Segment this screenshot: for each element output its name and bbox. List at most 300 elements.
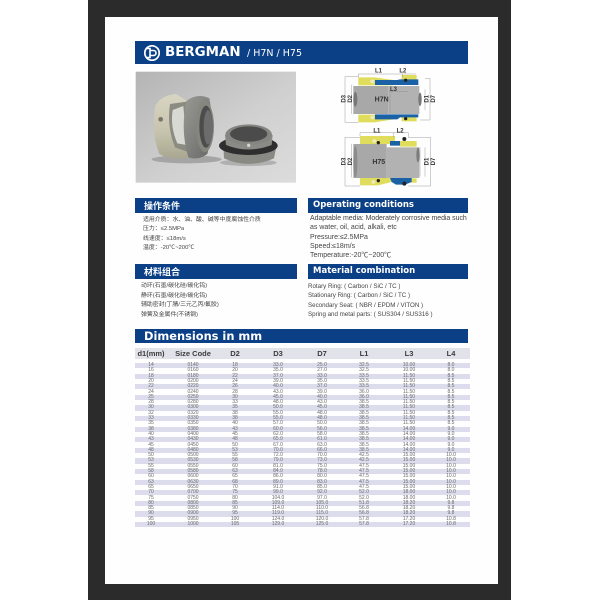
body text: Stationary Ring: ( Carbon / SiC / TC )	[308, 292, 410, 299]
table: dimensions: 36.0	[359, 394, 369, 400]
table: dimensions: 52.0	[359, 494, 369, 500]
table: dimensions: 55	[232, 452, 238, 458]
table: dimensions: 125.0	[316, 521, 328, 527]
table: dimensions: 33.0	[317, 373, 327, 379]
table: dimensions: 58.0	[317, 431, 327, 437]
table: dimensions: 57.8	[359, 516, 369, 522]
table: dimensions: 115.0	[316, 510, 328, 516]
table: dimensions: 100	[147, 521, 155, 527]
table: dimensions: 38.5	[359, 410, 369, 416]
table: dimensions: 15.00	[403, 452, 415, 458]
table: dimensions: 80.0	[317, 473, 327, 479]
table: dimensions: 33.5	[359, 383, 369, 389]
table: dimensions: 90	[232, 505, 238, 511]
body text: Pressure:≤2.5MPa	[310, 234, 368, 241]
table: dimensions: 24	[148, 388, 154, 394]
table: dimensions: 0500	[187, 452, 199, 458]
table: dimensions: 53	[232, 447, 238, 453]
table: dimensions: 18	[232, 362, 238, 368]
table: dimensions: 8.5	[448, 388, 454, 394]
table: dimensions: 0300	[187, 404, 199, 410]
table: dimensions: 67.0	[273, 442, 283, 448]
table: dimensions: 0200	[187, 378, 199, 384]
table: dimensions: 8.5	[448, 378, 454, 384]
table: dimensions: 32	[148, 410, 154, 416]
table: dimensions: 22	[148, 383, 154, 389]
table: dimensions: 9.0	[448, 426, 454, 432]
table: dimensions: 63	[148, 479, 154, 485]
table: dimensions: 91.0	[273, 484, 283, 490]
table: dimensions: 0160	[187, 367, 199, 373]
table: dimensions: 35	[148, 420, 154, 426]
picture frame	[88, 0, 511, 600]
table: dimensions: 51.8	[359, 500, 369, 506]
table: dimensions: 95	[232, 510, 238, 516]
table header row: D2	[230, 349, 240, 358]
table: dimensions: 75	[148, 494, 154, 500]
body text: 压力：≤2.5MPa	[143, 226, 184, 232]
table: dimensions: 47.5	[359, 479, 369, 485]
table: dimensions: 48	[148, 447, 154, 453]
table: dimensions: 9.0	[448, 436, 454, 442]
body text	[308, 283, 432, 318]
body text: 辅助密封(丁腈/三元乙丙/氟胶)	[141, 302, 219, 308]
table: dimensions: 75.0	[317, 463, 327, 469]
table: dimensions: 48	[232, 436, 238, 442]
table: dimensions: 0380	[187, 426, 199, 432]
table: dimensions: 25	[148, 394, 154, 400]
table: dimensions: 18.20	[403, 500, 415, 506]
table: dimensions: 11.50	[403, 420, 415, 426]
table: dimensions: 0320	[187, 410, 199, 416]
table: dimensions: 72.0	[273, 452, 283, 458]
table: dimensions: 10.0	[446, 484, 456, 490]
table: dimensions: 84.0	[273, 468, 283, 474]
diagram: H7N cross-section: D7	[431, 94, 437, 103]
shadow	[152, 155, 222, 163]
table: dimensions: 8.5	[448, 415, 454, 421]
table header row: D3	[273, 349, 283, 358]
table: dimensions: 90	[148, 510, 154, 516]
heading	[135, 198, 297, 213]
table: dimensions: 10.0	[446, 452, 456, 458]
table: dimensions: 47.5	[359, 484, 369, 490]
body text: Secondary Seat: ( NBR / EPDM / VITON )	[308, 302, 423, 309]
heading: dimensions in mm	[135, 329, 468, 343]
heading: dimensions in mm: Dimensions in mm	[144, 329, 262, 343]
table: dimensions: 0400	[187, 431, 199, 437]
table header row: L4	[447, 349, 455, 358]
heading: Operating conditions	[313, 200, 414, 210]
table: dimensions: 22	[232, 373, 238, 379]
page sheet	[105, 17, 498, 584]
table: dimensions: 18.00	[403, 494, 415, 500]
table: dimensions: 40	[148, 431, 154, 437]
table: dimensions: 17.20	[403, 521, 415, 527]
diagram: H75 cross-section: D3	[342, 157, 348, 165]
body text: 适用介质：水、油、酸、碱等中度腐蚀性介质	[143, 217, 261, 223]
table: dimensions: 10.0	[446, 479, 456, 485]
body text	[143, 216, 261, 251]
body text: 弹簧及金属件(不锈钢)	[141, 312, 198, 318]
table: dimensions: 15.00	[403, 468, 415, 474]
table: dimensions: 92.0	[317, 489, 327, 495]
body text: 动环(石墨/碳化硅/碳化钨)	[141, 283, 207, 289]
table: dimensions: 0850	[187, 505, 199, 511]
table: dimensions: 9.8	[448, 510, 454, 516]
table: dimensions: 38	[232, 410, 238, 416]
table: dimensions: 10.0	[446, 468, 456, 474]
table: dimensions: 8.0	[448, 367, 454, 373]
icon: Bergman logo	[144, 45, 160, 61]
table: dimensions: 80	[148, 500, 154, 506]
table: dimensions: 14.00	[403, 447, 415, 453]
table: dimensions: 9.0	[448, 442, 454, 448]
table: dimensions: 8.5	[448, 420, 454, 426]
table: dimensions: 70	[148, 489, 154, 495]
heading: 材料组合	[144, 265, 180, 278]
table: dimensions: 10.8	[446, 521, 456, 527]
table: dimensions: 38.5	[359, 404, 369, 410]
table: dimensions: 40.0	[273, 383, 283, 389]
table: dimensions: 50	[232, 442, 238, 448]
panel: operating conditions (Chinese)	[135, 198, 297, 251]
table: dimensions: 9.8	[448, 505, 454, 511]
table: dimensions: 28	[232, 388, 238, 394]
table: dimensions: 11.50	[403, 373, 415, 379]
table: dimensions: 68	[232, 479, 238, 485]
heading	[135, 264, 297, 279]
table: dimensions: 14	[148, 362, 154, 368]
table: dimensions: 85.0	[317, 484, 327, 490]
diagram: H7N cross-section: H7N	[375, 97, 389, 104]
table: dimensions: 81.0	[273, 463, 283, 469]
table: dimensions: 70.0	[317, 452, 327, 458]
table: dimensions: 0550	[187, 463, 199, 469]
table: dimensions: 48.0	[273, 399, 283, 405]
table: dimensions: 86.0	[273, 473, 283, 479]
table: dimensions: 42.5	[359, 457, 369, 463]
table: dimensions: 0950	[187, 516, 199, 522]
table: dimensions: 104.0	[272, 494, 284, 500]
table: dimensions: 129.0	[272, 521, 284, 527]
table: dimensions: 50	[148, 452, 154, 458]
diagram: H75 cross-section: L2	[397, 128, 404, 134]
table header row: d1(mm)	[137, 349, 165, 358]
table: dimensions: 10.0	[446, 494, 456, 500]
table: dimensions: 58	[148, 468, 154, 474]
table: dimensions: 0430	[187, 436, 199, 442]
panel: material combination (English)	[308, 264, 468, 318]
table: dimensions: 40.0	[317, 394, 327, 400]
table: dimensions: 80	[232, 494, 238, 500]
table: dimensions: 14.00	[403, 426, 415, 432]
table: dimensions: 70.0	[273, 447, 283, 453]
brand name: BERGMAN	[165, 45, 241, 60]
table: dimensions: 8.5	[448, 394, 454, 400]
table: dimensions: 38.5	[359, 431, 369, 437]
table: dimensions: 0280	[187, 399, 199, 405]
table: dimensions: 43	[148, 436, 154, 442]
table: dimensions: 45.0	[273, 394, 283, 400]
table header row	[135, 348, 470, 359]
table: dimensions: 48.0	[317, 415, 327, 421]
table: dimensions: 70	[232, 484, 238, 490]
table: dimensions: 85	[232, 500, 238, 506]
table: dimensions: 0180	[187, 373, 199, 379]
diagram: H7N cross-section: L1	[375, 69, 383, 75]
table: dimensions: 15.00	[403, 479, 415, 485]
table: dimensions: 14.00	[403, 431, 415, 437]
table: dimensions: 78.0	[317, 468, 327, 474]
table: dimensions: 11.50	[403, 388, 415, 394]
table: dimensions: 1000	[187, 521, 199, 527]
table: dimensions: 65.0	[273, 436, 283, 442]
table: dimensions: 38	[232, 415, 238, 421]
table: dimensions: 15.00	[403, 463, 415, 469]
table: dimensions: 0530	[187, 457, 199, 463]
table: dimensions: 48.0	[317, 410, 327, 416]
table: dimensions: 57.0	[273, 420, 283, 426]
table: dimensions: 15.00	[403, 473, 415, 479]
table: dimensions: 32.5	[359, 362, 369, 368]
table: dimensions: 24	[232, 378, 238, 384]
body text: 线速度：≤18m/s	[143, 236, 186, 242]
table: dimensions: 39.0	[273, 378, 283, 384]
diagram: H75 cross-section: H75	[372, 159, 385, 166]
table: dimensions: 43.0	[317, 399, 327, 405]
table: dimensions: 55.0	[273, 410, 283, 416]
table header row: L3	[405, 349, 413, 358]
table: dimensions: 40	[232, 420, 238, 426]
diagram: H7N cross-section: D1	[424, 94, 430, 103]
table: dimensions: 50.0	[317, 420, 327, 426]
table: dimensions: 110.0	[316, 505, 328, 511]
table: dimensions: 11.50	[403, 410, 415, 416]
table: dimensions: 65	[148, 484, 154, 490]
table: dimensions: 63	[232, 468, 238, 474]
body text: Spring and metal parts: ( SUS304 / SUS316 )	[308, 311, 432, 318]
table: dimensions: 37.0	[273, 373, 283, 379]
table: dimensions: 10.0	[446, 457, 456, 463]
table: dimensions: 0220	[187, 383, 199, 389]
table header row: L1	[360, 349, 368, 358]
table header row: D7	[317, 349, 327, 358]
table: dimensions: 10.00	[403, 367, 415, 373]
table: dimensions: 35.0	[273, 367, 283, 373]
table: dimensions: 11.50	[403, 383, 415, 389]
table: dimensions: 38	[148, 426, 154, 432]
table: dimensions: 0700	[187, 489, 199, 495]
table: dimensions: 75	[232, 489, 238, 495]
table: dimensions: 33	[148, 415, 154, 421]
table: dimensions: 15.00	[403, 457, 415, 463]
table: dimensions: 109.0	[272, 500, 284, 506]
table: dimensions: 16	[148, 367, 154, 373]
table: dimensions: 60	[148, 473, 154, 479]
table: dimensions: 25.0	[317, 362, 327, 368]
table: dimensions: 105	[231, 521, 239, 527]
table: dimensions: 50.0	[273, 404, 283, 410]
table header row: Size Code	[175, 349, 211, 358]
table: dimensions: 95	[148, 516, 154, 522]
table: dimensions: 38.5	[359, 415, 369, 421]
title banner	[135, 41, 468, 64]
table: dimensions: 120.0	[316, 516, 328, 522]
table: dimensions: 10.0	[446, 463, 456, 469]
table: dimensions: 45.0	[317, 404, 327, 410]
table: dimensions: 55	[148, 463, 154, 469]
table: dimensions: 61.0	[317, 436, 327, 442]
table: dimensions: 30	[148, 404, 154, 410]
table: dimensions: 33	[232, 399, 238, 405]
table: dimensions: 39.0	[317, 388, 327, 394]
table: dimensions: 45	[148, 442, 154, 448]
panel: operating conditions (English)	[308, 198, 468, 259]
table: dimensions: 9.8	[448, 500, 454, 506]
diagram: H7N cross-section: D2	[348, 94, 354, 103]
table: dimensions: 0580	[187, 468, 199, 474]
diagram: H7N cross-section: L3	[390, 87, 398, 93]
table: dimensions: 43	[232, 426, 238, 432]
table: dimensions: 114.0	[272, 505, 284, 511]
table: dimensions: 47.5	[359, 468, 369, 474]
body text: Rotary Ring: ( Carbon / SiC / TC )	[308, 283, 400, 290]
table: dimensions: 47.5	[359, 463, 369, 469]
body text: 温度：-20℃~200℃	[143, 245, 194, 251]
body text: as water, oil, acid, alkali, etc	[310, 224, 397, 231]
table: dimensions: 38.5	[359, 436, 369, 442]
table: dimensions: 8.5	[448, 399, 454, 405]
table: dimensions: 60.0	[273, 426, 283, 432]
table: dimensions: 53	[148, 457, 154, 463]
table: dimensions: 38.5	[359, 447, 369, 453]
table: dimensions: 100	[231, 516, 239, 522]
table: dimensions: 66.0	[317, 447, 327, 453]
table: dimensions: 18.00	[403, 489, 415, 495]
table: dimensions: 9.0	[448, 447, 454, 453]
body text: Speed:≤18m/s	[310, 243, 355, 250]
table: dimensions: 42.5	[359, 452, 369, 458]
table: dimensions: 45	[232, 431, 238, 437]
table: dimensions: 20	[232, 367, 238, 373]
table: dimensions: 11.50	[403, 415, 415, 421]
table: dimensions: 10.0	[446, 473, 456, 479]
table: dimensions: 0750	[187, 494, 199, 500]
body text: Temperature:-20℃~200℃	[310, 252, 391, 259]
diagram: H7N cross-section: L2	[399, 69, 407, 75]
table: dimensions: 11.50	[403, 404, 415, 410]
table: dimensions: 0350	[187, 420, 199, 426]
table: dimensions: 58	[232, 457, 238, 463]
table: dimensions: 38.5	[359, 420, 369, 426]
table: dimensions: 65	[232, 473, 238, 479]
table: dimensions: 56.8	[359, 505, 369, 511]
table: dimensions: 10.00	[403, 362, 415, 368]
heading	[308, 198, 468, 213]
table: dimensions: 73.0	[317, 457, 327, 463]
body text	[310, 214, 467, 259]
heading: Material combination	[313, 266, 415, 276]
heading: 操作条件	[144, 199, 180, 212]
table: dimensions: 0140	[187, 362, 199, 368]
table: dimensions: 62.0	[273, 431, 283, 437]
table: dimensions: 15.00	[403, 484, 415, 490]
table: dimensions: 9.0	[448, 431, 454, 437]
diagram: H75 cross-section: D7	[431, 157, 437, 165]
table: dimensions: 124.0	[272, 516, 284, 522]
table: dimensions: 63.0	[317, 442, 327, 448]
table: dimensions: 33.0	[273, 362, 283, 368]
diagram: H75 cross-section: D2	[348, 157, 354, 165]
table: dimensions: 32.5	[359, 367, 369, 373]
table: dimensions: 28	[148, 399, 154, 405]
table: dimensions: 14.00	[403, 436, 415, 442]
table: dimensions: 56.0	[317, 426, 327, 432]
table: dimensions: 38.5	[359, 442, 369, 448]
table: dimensions: 37.0	[317, 383, 327, 389]
table: dimensions: 8.5	[448, 410, 454, 416]
table: dimensions: 8.0	[448, 362, 454, 368]
table: dimensions: 0630	[187, 479, 199, 485]
diagram: H75 cross-section: L1	[373, 128, 381, 134]
table: dimensions: 27.0	[317, 367, 327, 373]
body text: 静环(石墨/碳化硅/碳化钨)	[141, 293, 207, 299]
table: dimensions: 11.50	[403, 394, 415, 400]
table: dimensions: 18.20	[403, 505, 415, 511]
table: dimensions: 33.5	[359, 378, 369, 384]
panel: material combination (Chinese)	[135, 264, 297, 318]
table: dimensions: 85	[148, 505, 154, 511]
table: dimensions: 0240	[187, 388, 199, 394]
body text	[141, 282, 219, 318]
diagram: H7N cross-section: D3	[342, 94, 348, 103]
table: dimensions: 11.50	[403, 378, 415, 384]
table: dimensions: 43.0	[273, 388, 283, 394]
table: dimensions: 8.5	[448, 383, 454, 389]
table: dimensions: 89.0	[273, 479, 283, 485]
table: dimensions: 0450	[187, 442, 199, 448]
table: dimensions: 18.20	[403, 510, 415, 516]
table: dimensions: 56.8	[359, 510, 369, 516]
table: dimensions: 36.0	[359, 388, 369, 394]
table: dimensions: 83.0	[317, 479, 327, 485]
table: dimensions: 57.8	[359, 521, 369, 527]
table: dimensions: 17.20	[403, 516, 415, 522]
table: dimensions: 0480	[187, 447, 199, 453]
table: dimensions: 0650	[187, 484, 199, 490]
table: dimensions: 33.5	[359, 373, 369, 379]
table: dimensions: 26	[232, 383, 238, 389]
model names: / H7N / H75	[247, 48, 302, 59]
heading	[308, 264, 468, 279]
table: dimensions: 10.0	[446, 489, 456, 495]
table: dimensions: 0800	[187, 500, 199, 506]
table: dimensions: 14.00	[403, 442, 415, 448]
table: dimensions: 20	[148, 378, 154, 384]
table: dimensions: 0250	[187, 394, 199, 400]
table: dimensions: 11.50	[403, 399, 415, 405]
table: dimensions: 8.5	[448, 373, 454, 379]
table: dimensions: 10.8	[446, 516, 456, 522]
table: dimensions: 119.0	[272, 510, 284, 516]
table: dimensions: 47.5	[359, 473, 369, 479]
table: dimensions: 0330	[187, 415, 199, 421]
table: dimensions: 99.0	[273, 489, 283, 495]
table: dimensions: 52.0	[359, 489, 369, 495]
diagram: H75 cross-section: D1	[424, 157, 430, 165]
table: dimensions: 8.5	[448, 404, 454, 410]
